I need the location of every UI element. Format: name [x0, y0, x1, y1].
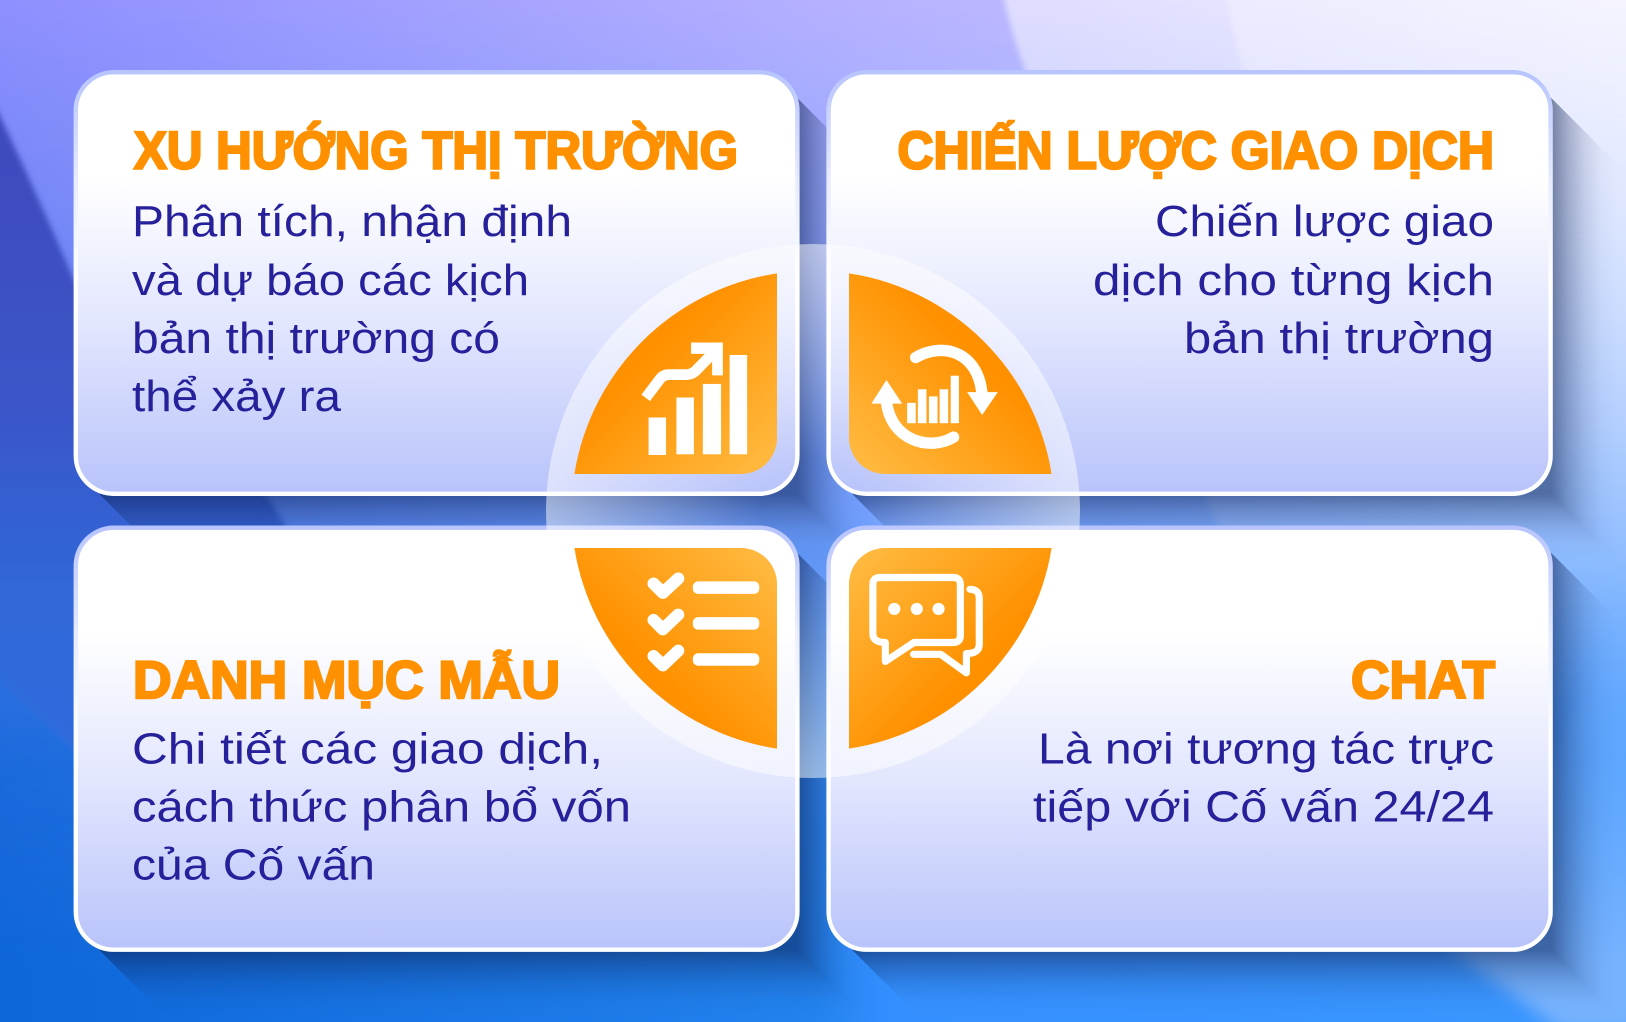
text: chat: [1033, 651, 1495, 832]
icon: checklist: [654, 579, 759, 666]
body: chat: Là nơi tương tác trực: [1038, 724, 1494, 773]
text: sample portfolio: [132, 651, 631, 889]
quadrant: sample portfolio icon: [574, 548, 777, 749]
body: market trends: Phân tích, nhận định: [132, 197, 572, 246]
heading: sample portfolio: DANH MỤC MẪU: [133, 651, 560, 710]
body: chat: [1033, 724, 1494, 832]
icon: cycle arrows with bars: [871, 350, 998, 443]
quadrant: chat icon: [849, 548, 1052, 749]
panel: sample portfolio card: [76, 528, 864, 1017]
heading: trading strategy: CHIẾN LƯỢC GIAO DỊCH: [898, 122, 1494, 180]
body: market trends: bản thị trường có: [132, 314, 500, 363]
body: sample portfolio: cách thức phân bổ vốn: [132, 783, 631, 832]
text: market trends: [132, 122, 738, 421]
icon: chat bubbles: [873, 577, 979, 673]
body: trading strategy: bản thị trường: [1184, 314, 1494, 363]
heading: market trends: XU HƯỚNG THỊ TRƯỜNG: [134, 122, 738, 180]
panel: market trends card: [76, 72, 864, 561]
body: trading strategy: Chiến lược giao: [1155, 197, 1494, 246]
panel: chat card: [829, 528, 1618, 1017]
body: market trends: [132, 197, 572, 421]
center translucent disc: [546, 244, 1080, 778]
heading: chat: CHAT: [1351, 651, 1495, 710]
body: trading strategy: dịch cho từng kịch: [1093, 256, 1494, 305]
body: trading strategy: [1093, 197, 1494, 363]
body: sample portfolio: [132, 724, 631, 889]
quadrant: trading strategy icon: [849, 273, 1052, 474]
body: market trends: và dự báo các kịch: [132, 256, 529, 305]
body: sample portfolio: của Cố vấn: [132, 840, 375, 889]
body: sample portfolio: Chi tiết các giao dịch,: [132, 724, 603, 773]
body: chat: tiếp với Cố vấn 24/24: [1033, 783, 1494, 832]
icon: rising bar chart: [646, 342, 747, 455]
panel: trading strategy card: [829, 72, 1618, 561]
text: trading strategy: [898, 122, 1494, 363]
body: market trends: thể xảy ra: [132, 372, 342, 421]
quadrant: market trends icon: [574, 273, 777, 474]
